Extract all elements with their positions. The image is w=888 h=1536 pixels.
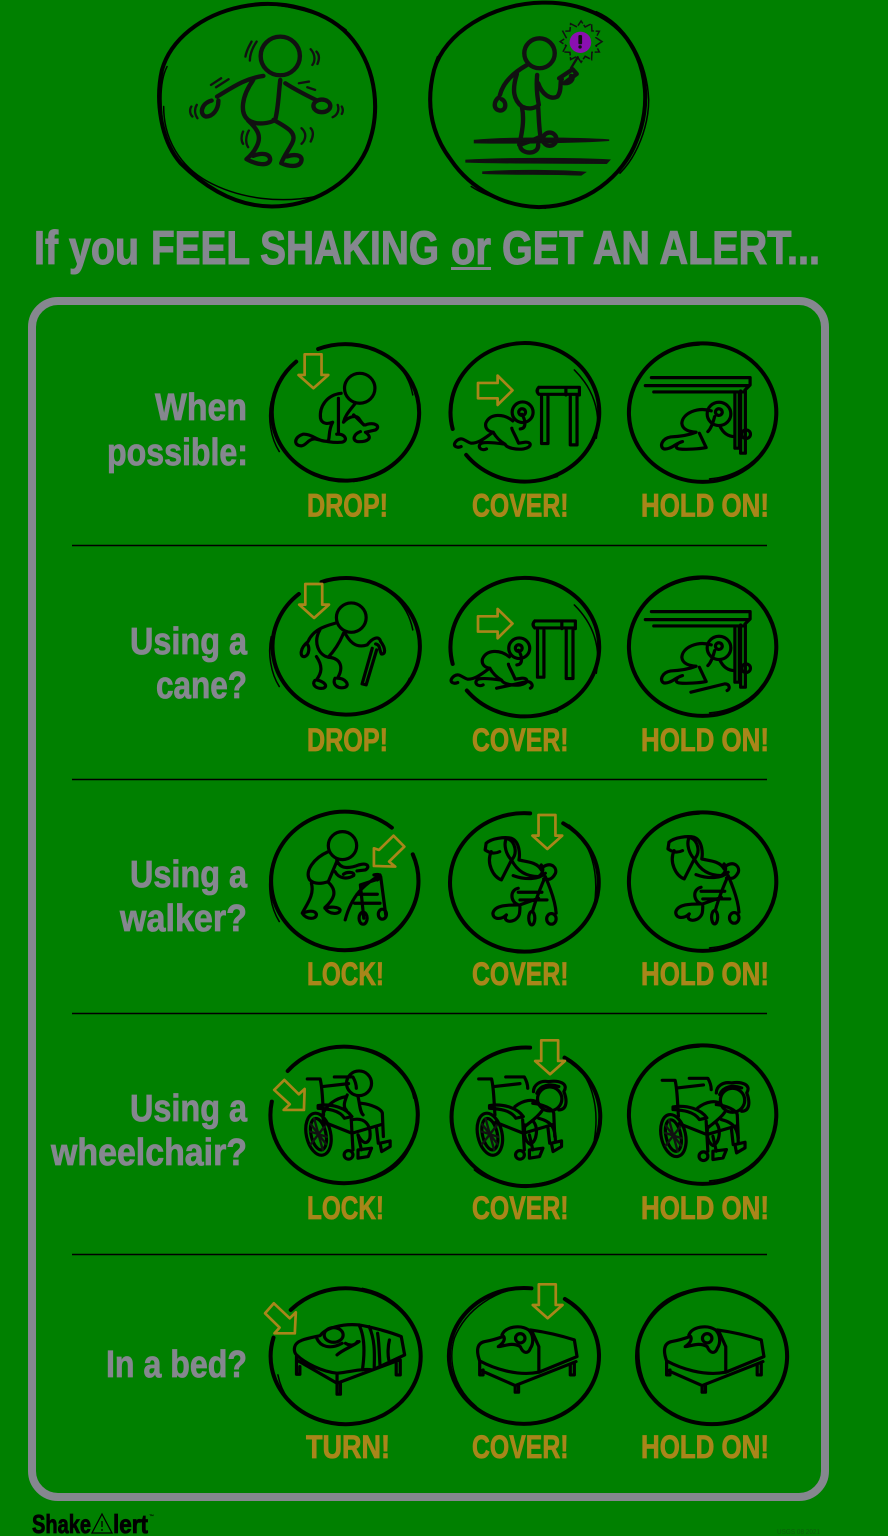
label: hold on: HOLD ON! — [641, 1429, 769, 1465]
row label: cane: cane? — [156, 665, 247, 707]
icon: cover wheelchair — [452, 1040, 600, 1186]
row label: wheelchair: Using a — [130, 1088, 248, 1130]
row: using a wheelchair — [50, 1040, 776, 1226]
label: cover: COVER! — [472, 488, 568, 524]
icon: drop with cane — [270, 578, 420, 715]
icon: hold on walker — [629, 812, 776, 951]
label: turn: TURN! — [306, 1429, 390, 1465]
label: hold on: HOLD ON! — [641, 956, 769, 992]
row label: when possible: possible: — [107, 432, 248, 474]
row: using a walker — [119, 812, 776, 992]
icon: hold on — [629, 343, 776, 482]
icon: cover walker — [450, 813, 599, 952]
label: hold on: HOLD ON! — [641, 722, 769, 758]
logo: ShakeAlert — [32, 1509, 154, 1536]
icon: cover — [451, 343, 599, 482]
row: when possible — [107, 343, 776, 524]
logo: ShakeAlert: ™ — [149, 1514, 154, 1520]
row label: when possible: When — [155, 387, 247, 429]
icon: cover in bed — [449, 1284, 599, 1424]
icon: cover with cane — [450, 578, 599, 716]
heading: or — [451, 221, 491, 274]
heading — [34, 221, 820, 274]
row label: walker: walker? — [119, 898, 247, 940]
row label: bed: In a bed? — [106, 1344, 247, 1386]
label: drop: DROP! — [307, 722, 388, 758]
icon: lock wheelchair — [270, 1047, 418, 1183]
icon: hold on with cane — [629, 577, 776, 716]
row label: when possible — [107, 387, 248, 474]
label: cover: COVER! — [472, 722, 568, 758]
icon: hold on wheelchair — [629, 1045, 776, 1184]
icon: person getting alert on phone — [430, 3, 649, 208]
row: in a bed — [106, 1284, 787, 1465]
label: hold on: HOLD ON! — [641, 1190, 769, 1226]
heading: FEEL SHAKING — [151, 221, 439, 274]
label: lock: LOCK! — [307, 956, 384, 992]
label: hold on: HOLD ON! — [641, 488, 769, 524]
heading: GET AN ALERT... — [502, 221, 820, 274]
row label: wheelchair: wheelchair? — [50, 1132, 247, 1174]
icon: hold on in bed — [637, 1288, 787, 1424]
panel: actions — [32, 301, 825, 1497]
icon: lock walker — [270, 812, 418, 951]
row label: cane — [130, 621, 248, 707]
row label: wheelchair — [50, 1088, 248, 1174]
label: cover: COVER! — [472, 956, 568, 992]
credit: USGS 08 2021 — [777, 1527, 820, 1536]
label: cover: COVER! — [472, 1429, 568, 1465]
icon: turn in bed — [265, 1288, 421, 1424]
label: cover: COVER! — [472, 1190, 568, 1226]
label: drop: DROP! — [307, 488, 388, 524]
row: using a cane — [130, 577, 776, 758]
icon: drop — [270, 344, 419, 482]
row label: walker — [119, 854, 248, 940]
heading: If you — [34, 221, 139, 274]
label: lock: LOCK! — [307, 1190, 384, 1226]
row label: walker: Using a — [130, 854, 248, 896]
row label: cane: Using a — [130, 621, 248, 663]
icon: person feeling shaking — [159, 4, 375, 206]
